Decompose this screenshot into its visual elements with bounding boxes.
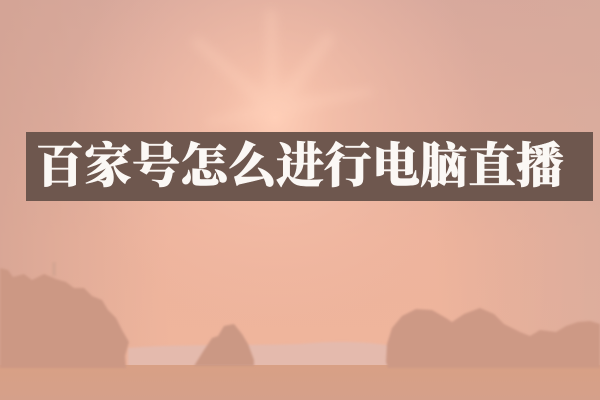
title banner xyxy=(26,132,593,201)
distant hills xyxy=(128,342,392,366)
title: 百家号怎么进行电脑直播 xyxy=(36,140,564,193)
small centre tree xyxy=(194,324,254,366)
field xyxy=(0,365,600,400)
right tree line xyxy=(386,308,600,368)
left tree mass xyxy=(0,262,129,368)
sun rays xyxy=(190,10,374,126)
